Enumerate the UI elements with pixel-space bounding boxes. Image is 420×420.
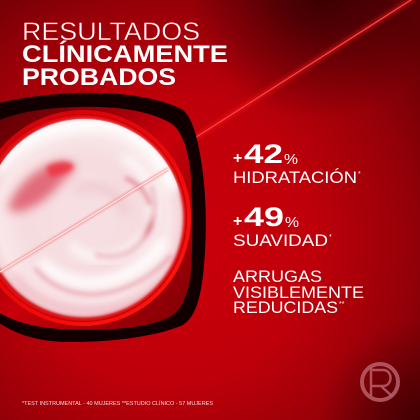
claim: arrugas visiblemente reducidas: ** xyxy=(339,301,345,308)
stat: +49% suavidad: 49 xyxy=(244,202,284,232)
cream jar xyxy=(0,93,206,342)
stat: +42% hidratación: + xyxy=(233,150,242,167)
jar: red glass corners xyxy=(0,107,192,330)
footnote: *TEST INSTRUMENTAL - 40 MUJERES **ESTUDIO CLÍNICO - 57 MUJERES xyxy=(22,400,213,407)
icon: brand logo xyxy=(362,364,398,400)
title: RESULTADOS xyxy=(22,18,200,46)
claim: arrugas visiblemente reducidas: ARRUGAS xyxy=(233,267,322,286)
stat: +42% hidratación: % xyxy=(284,151,298,168)
stat: +49% suavidad: * xyxy=(329,234,332,241)
title: CLÍNICAMENTE xyxy=(22,40,228,68)
stat: +42% hidratación xyxy=(233,139,361,187)
title xyxy=(22,18,228,91)
jar: black outer shell xyxy=(0,93,206,342)
stat: +49% suavidad xyxy=(233,202,332,250)
stat: +49% suavidad: + xyxy=(233,213,242,230)
jar: cream surface xyxy=(0,118,184,318)
stat: +42% hidratación: * xyxy=(358,171,361,178)
jar: cream swirls xyxy=(0,124,175,310)
title: PROBADOS xyxy=(22,64,176,91)
claim: arrugas visiblemente reducidas: VISIBLEMENTE xyxy=(233,283,364,302)
stat: +42% hidratación: HIDRATACIÓN xyxy=(233,168,357,187)
claim: arrugas visiblemente reducidas: REDUCIDAS xyxy=(233,298,338,317)
claim: arrugas visiblemente reducidas xyxy=(233,267,364,317)
stat: +49% suavidad: SUAVIDAD xyxy=(233,231,328,250)
laser beam xyxy=(190,0,414,141)
stat: +49% suavidad: % xyxy=(285,214,299,231)
stat: +42% hidratación: 42 xyxy=(244,139,283,169)
jar: red ring xyxy=(0,112,189,324)
laser across cream xyxy=(0,169,168,272)
